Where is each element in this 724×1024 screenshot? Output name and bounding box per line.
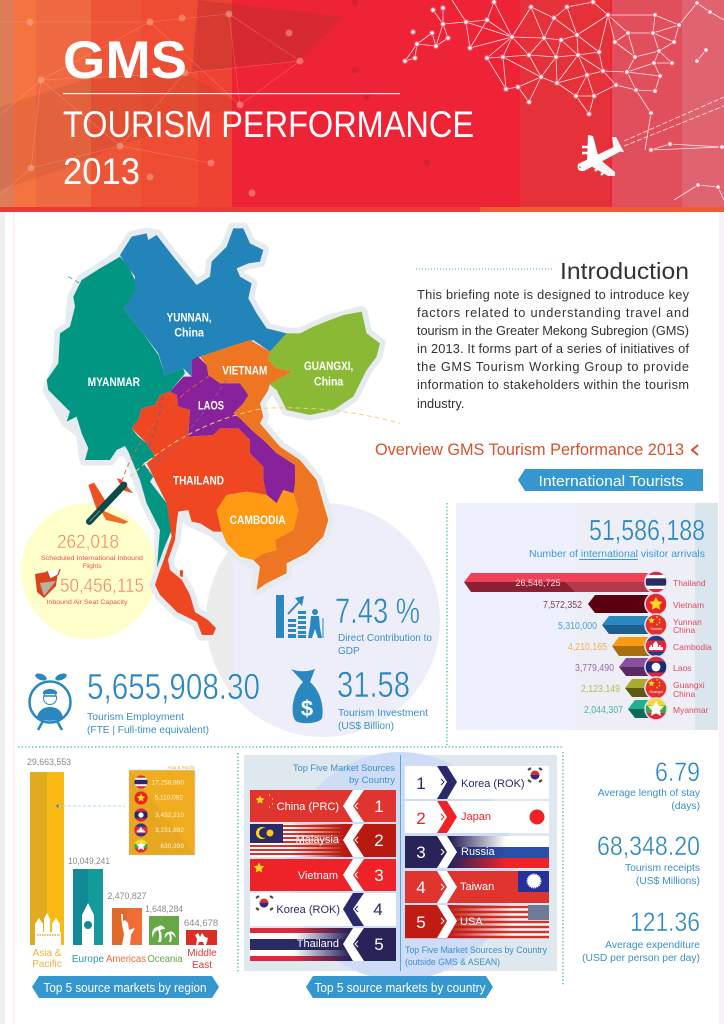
yellow circle backdrop [21, 503, 157, 639]
bar: Oceania [145, 904, 183, 965]
bar: Yunnan [558, 614, 702, 636]
bar: Myanmar: 2,044,307 [584, 705, 623, 716]
ribbon: international tourists [518, 469, 703, 491]
map labels: LAOS [198, 398, 224, 412]
connector [56, 804, 125, 808]
kpi: employment: (FTE | Full-time equivalent) [87, 725, 209, 736]
kpi: GDP: Direct Contribution to [338, 633, 432, 644]
map labels: VIETNAM [222, 363, 267, 377]
bar: Vietnam: Vietnam [673, 600, 704, 610]
left heading [293, 763, 396, 785]
row: China [250, 790, 396, 822]
row: Korea outside [405, 766, 549, 799]
row: USA: USA [460, 916, 483, 928]
intro paragraph: This briefing note is designed to introduce key [417, 287, 690, 302]
row: Japan: 2 [416, 809, 426, 828]
map halo [48, 228, 380, 635]
bar: Middle East [184, 918, 218, 971]
bar: Guangxi: Guangxi [673, 680, 705, 690]
ribbon: by region [32, 976, 219, 998]
bar: Oceania: 1,648,284 [145, 904, 183, 915]
left heading: by Country [349, 775, 396, 785]
region: Laos [170, 357, 295, 503]
stat: tourism receipts: 68,348.20 [597, 831, 700, 861]
kpi: GDP: 7.43 % [335, 592, 420, 631]
section dividers [18, 503, 563, 985]
row: Japan [405, 801, 549, 833]
bar: Middle East: Middle [187, 948, 217, 959]
bar: Americas [106, 891, 146, 965]
kpi: employment: Tourism Employment [87, 712, 184, 723]
bar: Myanmar: Myanmar [673, 705, 709, 715]
map labels: China [314, 374, 344, 388]
kpi: investment: (US$ Billion) [338, 721, 394, 732]
bar: Europe [68, 856, 110, 965]
row: Korea [250, 893, 396, 926]
bar: Oceania: Oceania [148, 954, 183, 965]
intro section [416, 258, 690, 411]
row: USA: 5 [416, 913, 426, 932]
map labels: CAMBODIA [230, 513, 286, 527]
intro paragraph: in 2013. It forms part of a series of initiatives of [417, 341, 689, 356]
inset: Asia & Pacific countries: 630,399 [160, 843, 184, 850]
inset: Asia & Pacific countries: 5,110,092 [155, 794, 183, 802]
icon: clock with person [30, 672, 70, 730]
kpi: investment: Tourism Investment [338, 708, 428, 719]
title: GMS: GMS [63, 31, 187, 90]
stat: length of stay: Average length of stay [598, 788, 701, 799]
overview heading: Overview GMS Tourism Performance 2013 [375, 441, 684, 459]
icon: money bag: $ [301, 696, 313, 721]
map labels: China [174, 326, 204, 340]
stats: flights and seats: 262,018 [57, 532, 119, 553]
bar: Asia & Pacific: 29,663,553 [27, 757, 71, 768]
icon: orange plane [88, 478, 133, 524]
stat: average expenditure: 121.36 [630, 907, 700, 937]
flight routes [68, 277, 400, 482]
bar: Thailand: Thailand [673, 578, 706, 588]
intro paragraph: factors related to understanding travel and [417, 305, 689, 320]
right caption: (outside GMS & ASEAN) [405, 957, 500, 967]
stat: average expenditure [582, 907, 700, 964]
bar: Yunnan: Yunnan [650, 627, 662, 631]
faint network left [0, 3, 427, 195]
row: Vietnam [250, 859, 396, 891]
network graphic [405, 0, 724, 200]
map labels: GUANGXI, [304, 359, 353, 373]
stats: flights and seats: Flights [82, 563, 102, 570]
kpi: investment [291, 664, 428, 732]
stats: flights and seats: 50,456,115 [60, 576, 144, 597]
right caption [405, 945, 547, 967]
intro paragraph: information to stakeholders within the tourism [417, 377, 689, 392]
bar: Americas: Americas [106, 954, 146, 965]
region: Cambodia [217, 490, 298, 560]
bar: Europe: 10,049,241 [68, 856, 110, 867]
row: Thailand [250, 928, 396, 961]
icon: white plane [578, 97, 724, 176]
intro paragraph [417, 287, 690, 411]
icon: seat [35, 569, 60, 598]
stat: tourism receipts: Tourism receipts [625, 863, 700, 874]
row: Vietnam: Vietnam [298, 870, 338, 882]
row: Thailand: 5 [374, 935, 384, 954]
stat: length of stay: (days) [671, 801, 700, 812]
bar: Asia & Pacific [27, 757, 71, 970]
intro paragraph: tourism in the Greater Mekong Subregion (GMS) [417, 323, 689, 338]
bar: Thailand [464, 571, 706, 593]
bar: Middle East: East [192, 960, 212, 971]
row: Thailand: Thailand [297, 938, 339, 950]
row: Taiwan: Taiwan [460, 881, 494, 893]
bar: Yunnan: 5,310,000 [558, 621, 597, 632]
inset: Asia & Pacific countries: 17,258,960 [151, 780, 184, 786]
row: Japan: Japan [461, 811, 491, 823]
row: Korea: Korea (ROK) [276, 904, 340, 916]
bar: Myanmar [584, 698, 709, 720]
kpi: employment: 5,655,908.30 [87, 666, 260, 707]
ribbon: by country: Top 5 source markets by country [314, 981, 486, 995]
stat: length of stay [598, 757, 701, 812]
bar: Vietnam: 7,572,352 [543, 600, 582, 611]
bar: Laos: 3,779,490 [575, 663, 614, 674]
stat: average expenditure: (USD per person per day) [582, 953, 700, 964]
left heading: Top Five Market Sources [293, 763, 396, 773]
row: China: 1 [374, 797, 384, 816]
row: Korea outside: 1 [416, 774, 426, 793]
row: Vietnam: 3 [374, 866, 384, 885]
title: tourism performance: TOURISM PERFORMANCE [63, 104, 474, 145]
region: Guangxi [268, 312, 380, 415]
row: Malaysia: 2 [374, 831, 384, 850]
bar: Laos: Laos [673, 663, 691, 673]
region: Vietnam [200, 340, 328, 590]
kpi: GDP [276, 592, 432, 657]
row: Russia: 3 [416, 843, 426, 862]
intro heading: Introduction [560, 258, 689, 284]
chart: source markets by region [27, 757, 218, 971]
map labels: YUNNAN, [167, 311, 212, 325]
ribbon: international tourists: International Tourists [538, 473, 684, 490]
title rule [63, 93, 400, 94]
row: Russia: Russia [461, 846, 496, 858]
stats: flights and seats [35, 532, 144, 606]
ribbon: by country [306, 976, 493, 998]
ribbon: by region: Top 5 source markets by region [44, 981, 207, 995]
panel: international visitor arrivals [456, 503, 718, 730]
page edges [0, 212, 724, 1024]
row: Russia [405, 836, 549, 868]
intro paragraph: industry. [417, 396, 464, 411]
stat: tourism receipts: (US$ Millions) [636, 876, 700, 887]
bar: Guangxi [581, 677, 705, 699]
row: Korea: 4 [373, 900, 383, 919]
row: Taiwan: 4 [416, 878, 426, 897]
map of the Greater Mekong Subregion [47, 228, 400, 635]
bar: Asia & Pacific: Asia & [33, 948, 62, 959]
row: Malaysia [250, 824, 396, 857]
bar: Cambodia [568, 635, 712, 657]
stat: tourism receipts [597, 831, 700, 887]
bar: Asia & Pacific: Pacific [32, 959, 62, 970]
right caption: Top Five Market Sources by Country [405, 945, 547, 955]
kpi: employment [30, 666, 260, 736]
bar: Cambodia: 4,210,165 [568, 642, 607, 653]
arrivals caption: Number of international visitor arrivals [529, 548, 705, 560]
inset: Asia & Pacific countries: 3,231,892 [155, 827, 184, 834]
stat: length of stay: 6.79 [655, 757, 700, 787]
lilac circle backdrop [200, 500, 440, 740]
bar: Yunnan: Yunnan [673, 617, 702, 627]
bar: Thailand: 26,546,725 [516, 578, 560, 589]
stats: flights and seats: Inbound Air Seat Capacity [46, 599, 128, 606]
title: year: 2013 [63, 151, 140, 192]
intro paragraph: the GMS Tourism Working Group to provide [417, 359, 689, 374]
bar: Middle East: 644,678 [184, 918, 218, 929]
region: Myanmar [47, 257, 185, 568]
bar: Vietnam [543, 593, 704, 615]
bar: Cambodia: Cambodia [673, 642, 712, 652]
inset: Asia & Pacific countries [129, 765, 196, 855]
bar: Guangxi: 2,123,149 [581, 684, 620, 695]
kpi: GDP: GDP [338, 646, 360, 657]
bar: Europe: Europe [72, 954, 105, 965]
inset: Asia & Pacific countries: Asia & Pacific [167, 765, 196, 770]
kpi: investment: 31.58 [337, 664, 410, 705]
bar: Yunnan: China [673, 625, 695, 635]
map labels: THAILAND [173, 473, 224, 487]
row: Malaysia: Malaysia [296, 834, 340, 846]
bar: Guangxi: Guangxi [649, 690, 663, 694]
row: USA [405, 905, 549, 938]
map labels [88, 311, 353, 527]
stat: average expenditure: Average expenditure [605, 940, 700, 951]
row: Taiwan [405, 871, 549, 903]
bar: Laos [575, 656, 691, 678]
row: Korea outside: Korea (ROK) [461, 778, 525, 790]
stats: flights and seats: Scheduled International Inbound [41, 555, 143, 562]
panel: top five market sources [244, 752, 557, 980]
row: China: China (PRC) [277, 801, 339, 813]
map labels: MYANMAR [88, 375, 140, 389]
region: Yunnan [120, 228, 287, 377]
inset: Asia & Pacific countries: 3,432,210 [155, 812, 184, 819]
header banner [0, 0, 724, 212]
bar: Guangxi: China [673, 689, 695, 699]
icon: bars and hiker [276, 595, 323, 638]
region: Thailand [132, 392, 267, 635]
bar: Americas: 2,470,827 [108, 891, 146, 902]
